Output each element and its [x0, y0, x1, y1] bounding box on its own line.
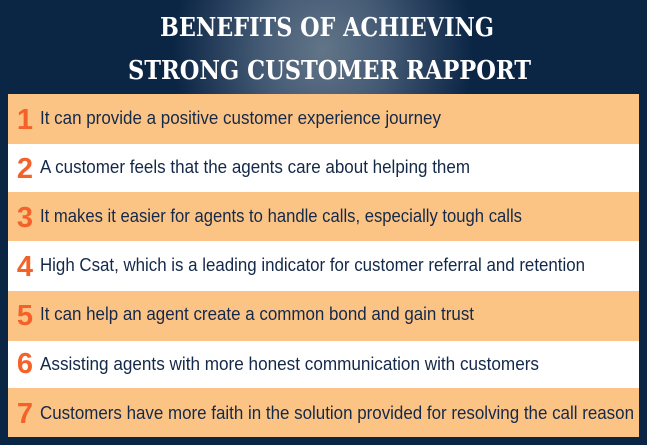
title: BENEFITS OF ACHIEVING — [160, 13, 494, 43]
benefit row 4 — [8, 241, 639, 291]
benefit row 6: 6 — [17, 348, 33, 380]
benefit row 2 — [8, 144, 639, 192]
title — [128, 13, 532, 86]
header glow — [173, 0, 473, 94]
benefit row 5: 5 — [17, 300, 33, 332]
benefit row 1: It can provide a positive customer experience journey — [40, 107, 442, 128]
benefit row 7 — [8, 388, 639, 437]
benefit row 5: It can help an agent create a common bond and gain trust — [40, 303, 474, 324]
benefit row 6: Assisting agents with more honest communication with customers — [40, 353, 539, 374]
benefit row 5 — [8, 291, 639, 341]
benefit row 2: 2 — [17, 153, 33, 185]
benefit row 7: 7 — [17, 398, 33, 430]
title: STRONG CUSTOMER RAPPORT — [128, 56, 532, 86]
benefit row 3: 3 — [17, 202, 33, 234]
benefit row 4: 4 — [17, 251, 33, 283]
benefit row 1: 1 — [17, 104, 33, 136]
benefit row 3 — [8, 192, 639, 241]
benefit row 2: A customer feels that the agents care about helping them — [40, 156, 470, 177]
benefit row 6 — [8, 341, 639, 388]
benefit row 4: High Csat, which is a leading indicator for customer referral and retention — [40, 254, 585, 275]
benefit row 1 — [8, 94, 639, 144]
benefit row 3: It makes it easier for agents to handle calls, especially tough calls — [40, 205, 522, 226]
